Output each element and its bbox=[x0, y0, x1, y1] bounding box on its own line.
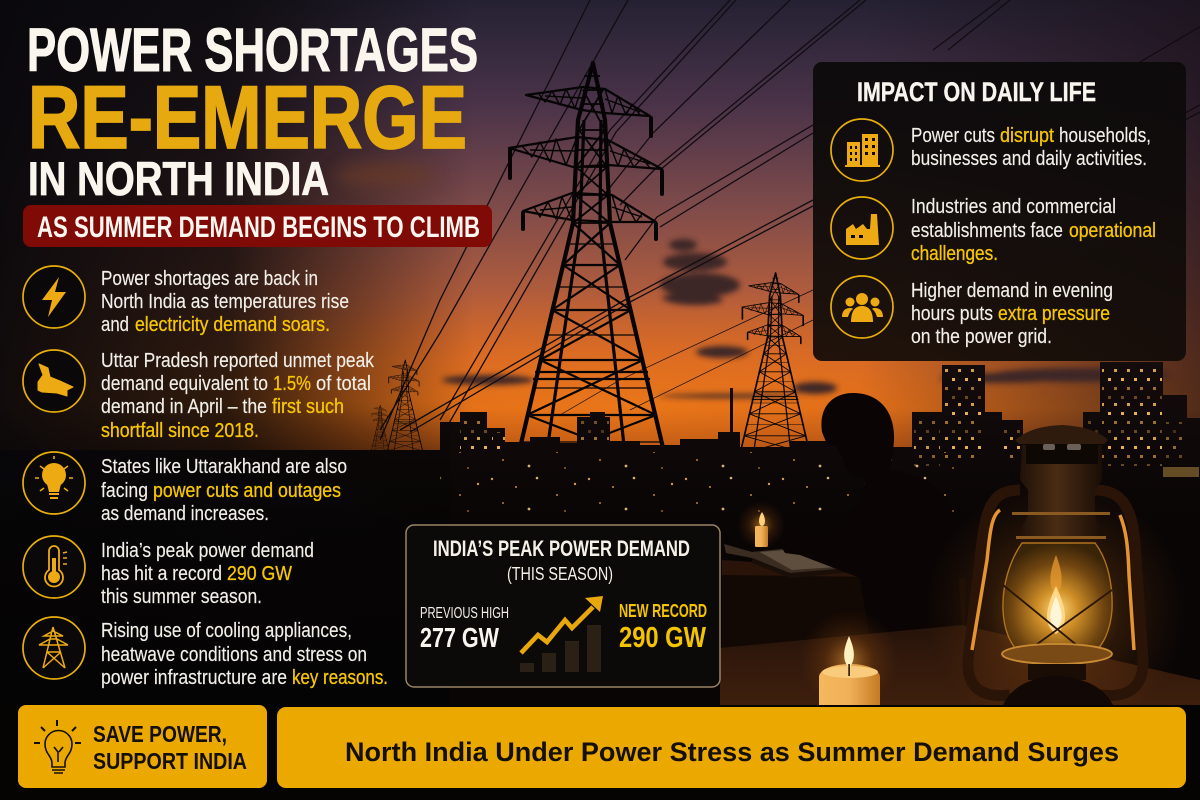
icon: buildings bbox=[831, 119, 893, 181]
icon: people bbox=[831, 276, 893, 338]
title line 3: IN NORTH INDIA bbox=[28, 152, 329, 205]
impact text 1 bbox=[911, 125, 1151, 170]
stat: new record: 290 GW bbox=[619, 622, 707, 654]
power lines bbox=[380, 0, 1200, 440]
background: horizon glow bbox=[200, 285, 1040, 525]
point 4: record demand bbox=[23, 536, 314, 608]
panel heading: IMPACT ON DAILY LIFE bbox=[857, 77, 1096, 107]
clouds bbox=[442, 239, 1170, 398]
icon: lightning bolt bbox=[23, 266, 85, 328]
city skyline bbox=[0, 362, 1200, 720]
text block 5: key reasons. bbox=[292, 667, 388, 689]
bottom band bbox=[0, 705, 1200, 800]
transmission tower: distant bbox=[740, 273, 810, 456]
text block 3: facing bbox=[101, 480, 148, 502]
impact text 2: challenges. bbox=[911, 243, 998, 265]
point 3: Uttarakhand bbox=[23, 452, 347, 525]
transmission tower: farthest bbox=[371, 405, 389, 451]
point 2: Uttar Pradesh bbox=[23, 350, 375, 442]
small candle bbox=[737, 501, 785, 549]
title bbox=[27, 16, 478, 205]
foreground table bbox=[720, 625, 1200, 710]
left lower dark overlay bbox=[0, 400, 450, 720]
text block 2 bbox=[101, 350, 375, 442]
transmission tower: far left bbox=[387, 360, 423, 451]
text block 1: and bbox=[101, 314, 129, 336]
stat: previous high bbox=[420, 605, 509, 653]
stat: new record: NEW RECORD bbox=[619, 601, 707, 621]
impact text 3: hours puts bbox=[911, 303, 993, 325]
text block 2: first such bbox=[272, 396, 344, 418]
icon: pylon bbox=[23, 617, 85, 679]
text block 1: electricity demand soars. bbox=[135, 314, 330, 336]
text block 4: 290 GW bbox=[227, 563, 292, 585]
point 5: reasons bbox=[23, 617, 388, 689]
impact text 2: operational bbox=[1069, 220, 1156, 242]
icon: light bulb bbox=[23, 452, 85, 514]
title line 1: POWER SHORTAGES bbox=[27, 16, 478, 84]
text block 4: has hit a record bbox=[101, 563, 222, 585]
text block 4: India’s peak power demand bbox=[101, 540, 314, 562]
icon: Uttar Pradesh map bbox=[23, 350, 85, 412]
text block 2: demand in April – the bbox=[101, 396, 267, 418]
impact text 3: Higher demand in evening bbox=[911, 280, 1113, 302]
point 1: shortages are back bbox=[23, 266, 349, 336]
impact text 3: extra pressure bbox=[998, 303, 1110, 325]
text block 5 bbox=[101, 620, 388, 689]
lantern bbox=[926, 425, 1186, 740]
text block 1: North India as temperatures rise bbox=[101, 291, 349, 313]
text block 5: heatwave conditions and stress on bbox=[101, 644, 367, 666]
text block 1: Power shortages are back in bbox=[101, 268, 318, 290]
city ground lights bbox=[440, 452, 960, 514]
text block 3: States like Uttarakhand are also bbox=[101, 456, 347, 478]
text block 1 bbox=[101, 268, 349, 336]
text block 2: of total bbox=[316, 373, 371, 395]
impact text 1: businesses and daily activities. bbox=[911, 148, 1147, 170]
impact text 2: Industries and commercial bbox=[911, 196, 1116, 218]
desk with book bbox=[722, 544, 965, 665]
stats subheading: (THIS SEASON) bbox=[507, 564, 613, 584]
text block 3: power cuts and outages bbox=[153, 480, 341, 502]
impact text 1: Power cuts bbox=[911, 125, 995, 147]
footer banner bbox=[277, 707, 1186, 788]
badge text: SUPPORT INDIA bbox=[93, 748, 247, 774]
left dark overlay bbox=[0, 0, 510, 720]
stat: previous high: PREVIOUS HIGH bbox=[420, 605, 509, 622]
text block 4 bbox=[101, 540, 314, 608]
text block 4: this summer season. bbox=[101, 586, 262, 608]
text block 2: demand equivalent to bbox=[101, 373, 268, 395]
large candle bbox=[799, 610, 899, 710]
stats heading: INDIA’S PEAK POWER DEMAND bbox=[433, 536, 690, 561]
text block 3 bbox=[101, 456, 347, 525]
title line 2: RE-EMERGE bbox=[28, 67, 467, 167]
subtitle banner: AS SUMMER DEMAND BEGINS TO CLIMB bbox=[37, 211, 480, 244]
impact text 3 bbox=[911, 280, 1113, 348]
impact text 2 bbox=[911, 196, 1156, 265]
text block 2: 1.5% bbox=[273, 373, 311, 395]
footer banner: North India Under Power Stress as Summer Demand Surges bbox=[345, 737, 1119, 767]
background: right shade bbox=[860, 0, 1200, 520]
badge: save power bbox=[18, 705, 267, 788]
icon: outline bulb bbox=[34, 720, 81, 773]
text block 2: shortfall since 2018. bbox=[101, 420, 259, 442]
text block 5: Rising use of cooling appliances, bbox=[101, 620, 352, 642]
text block 2: Uttar Pradesh reported unmet peak bbox=[101, 350, 375, 372]
transmission tower: large bbox=[503, 63, 680, 520]
impact text 2: establishments face bbox=[911, 220, 1063, 242]
icon: factory bbox=[831, 197, 893, 259]
badge text: SAVE POWER, bbox=[93, 721, 227, 747]
chart: rising bars and arrow bbox=[520, 596, 603, 672]
panel: peak power demand stats bbox=[406, 525, 720, 687]
panel: impact on daily life bbox=[813, 62, 1186, 361]
man writing silhouette bbox=[777, 393, 962, 640]
subtitle banner bbox=[23, 205, 492, 247]
cloud beside title bbox=[335, 163, 435, 187]
stat: previous high: 277 GW bbox=[420, 622, 499, 653]
text block 5: power infrastructure are bbox=[101, 667, 287, 689]
stat: new record bbox=[619, 601, 707, 654]
impact text 1: households, bbox=[1059, 125, 1151, 147]
icon: thermometer bbox=[23, 536, 85, 598]
badge text bbox=[93, 721, 247, 774]
text block 3: as demand increases. bbox=[101, 503, 269, 525]
impact text 1: disrupt bbox=[1000, 125, 1054, 147]
impact text 3: on the power grid. bbox=[911, 326, 1052, 348]
